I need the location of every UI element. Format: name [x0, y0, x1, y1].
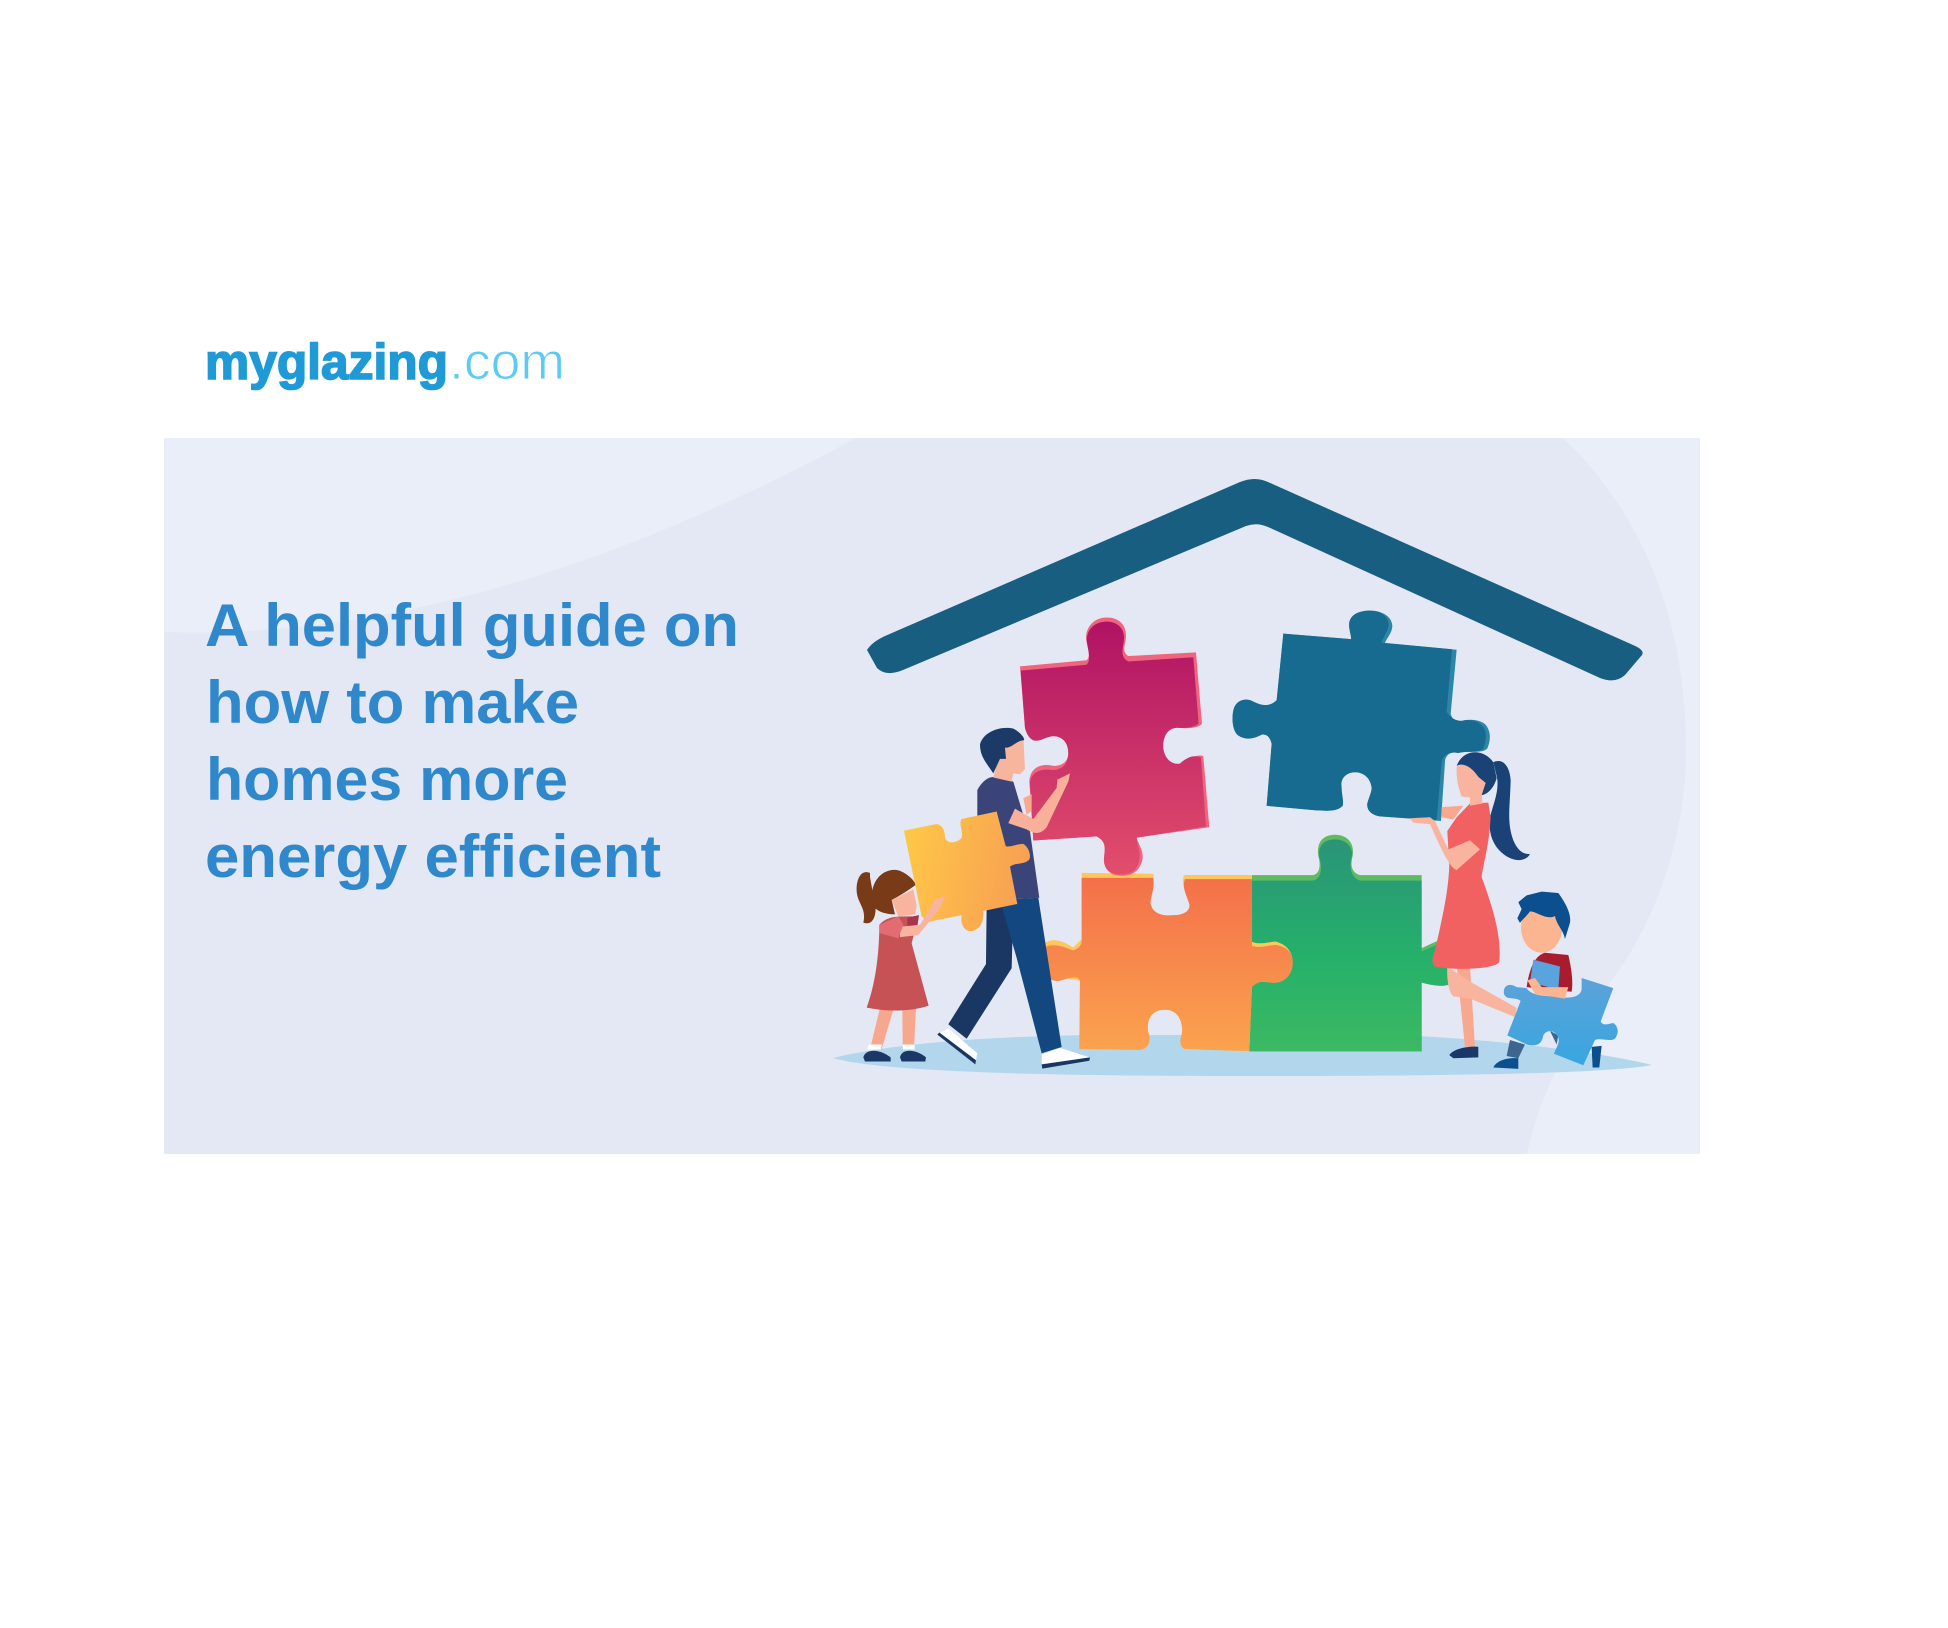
puzzle piece: magenta — [1020, 617, 1209, 876]
logo: myglazing.com — [205, 333, 565, 391]
ground shadow — [833, 1035, 1652, 1076]
logo: myglazing.com: .com — [449, 333, 565, 391]
title: guide heading: A helpful guide on — [205, 592, 739, 659]
puzzle piece: orange — [1044, 873, 1293, 1051]
figure: woman in red dress — [1410, 752, 1530, 1058]
puzzle piece: green — [1249, 835, 1448, 1051]
puzzle piece: dark blue — [1233, 611, 1490, 821]
title: guide heading — [205, 592, 739, 890]
figure: man in navy t-shirt — [937, 728, 1090, 1069]
title: guide heading: how to make — [206, 669, 579, 736]
roof — [867, 479, 1643, 680]
puzzle piece: yellow — [904, 812, 1030, 931]
panel: hero background — [164, 438, 1700, 1154]
title: guide heading: energy efficient — [205, 823, 661, 890]
logo: myglazing.com: myglazing — [205, 334, 448, 390]
illustration: family building a house from puzzle pieces — [833, 479, 1652, 1076]
figure: girl in pink dress — [857, 870, 945, 1062]
title: guide heading: homes more — [206, 746, 568, 813]
figure: boy carrying blue puzzle piece — [1493, 892, 1618, 1069]
